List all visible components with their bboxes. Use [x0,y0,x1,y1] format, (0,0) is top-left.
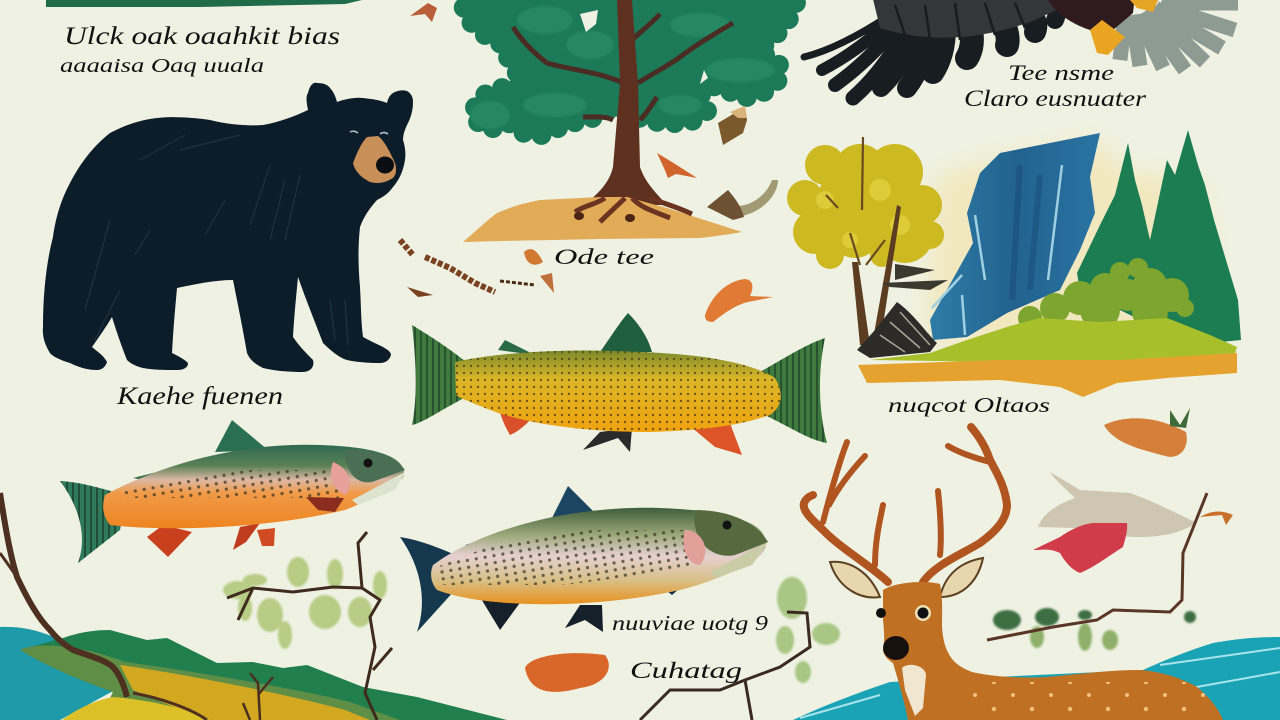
canopy highlights [470,6,775,129]
landscape caption: nuqcot Oltaos [888,393,1050,417]
deer [804,427,1223,720]
eagle caption: Tee nsme [1008,60,1114,85]
body [883,582,1223,720]
sprig middle [640,577,840,720]
hills [20,630,507,720]
bushes [1018,258,1194,330]
orange leaf [705,279,773,322]
orange salmon piece [525,653,609,692]
trunk [590,0,667,205]
debris near tree [400,3,778,322]
striped wing rock [857,302,937,358]
sprig right [987,493,1207,651]
acorn [718,107,747,145]
eagle talon [1090,20,1125,55]
conifers [1077,130,1241,345]
ears [830,562,880,597]
cream sky [925,140,1225,345]
bottom caption: Cuhatag [630,658,742,683]
antlers [804,427,1007,582]
roots [575,198,692,222]
meadow [870,318,1237,362]
canopy gaps [580,10,708,84]
lower trout [400,486,768,632]
eagle caption [964,60,1147,111]
bear caption: Kaehe fuenen [116,383,283,410]
eagle covert [872,0,1090,38]
left trout [60,420,405,563]
mushroom [738,180,778,216]
center yellow fish [412,313,827,455]
bottom caption [612,611,769,683]
ground [858,353,1237,397]
eagle tail [1120,3,1238,70]
nose [883,636,909,660]
bear fur strokes [85,135,348,345]
bare branch left [0,493,207,720]
top-left caption [46,0,362,77]
bear muzzle [353,136,396,183]
orange meat piece [1104,418,1187,457]
water left [0,627,115,720]
branch sprig [223,532,392,720]
waterfall [930,133,1100,340]
red leaf [657,153,697,178]
tree caption: Ode tee [554,244,654,269]
bear [43,83,413,372]
water right [793,637,1280,720]
meat carcass [1033,472,1233,573]
chest blaze [902,665,926,716]
eagle wing feathers [804,0,1057,98]
bottom caption: nuuviae uotg 9 [612,611,769,635]
eagle caption: Claro eusnuater [964,86,1147,111]
eagle body [1045,0,1135,30]
eagle [804,0,1238,98]
mound [463,197,742,242]
eyes [915,605,931,621]
top-left caption: aaaaisa Oaq uuala [60,55,264,77]
canopy [460,0,800,135]
landscape [787,130,1241,397]
branches [513,14,733,120]
top-left caption: Ulck oak oaahkit bias [64,23,340,50]
root chain [400,240,495,292]
yellow tree [787,144,944,269]
oak tree [460,0,800,242]
